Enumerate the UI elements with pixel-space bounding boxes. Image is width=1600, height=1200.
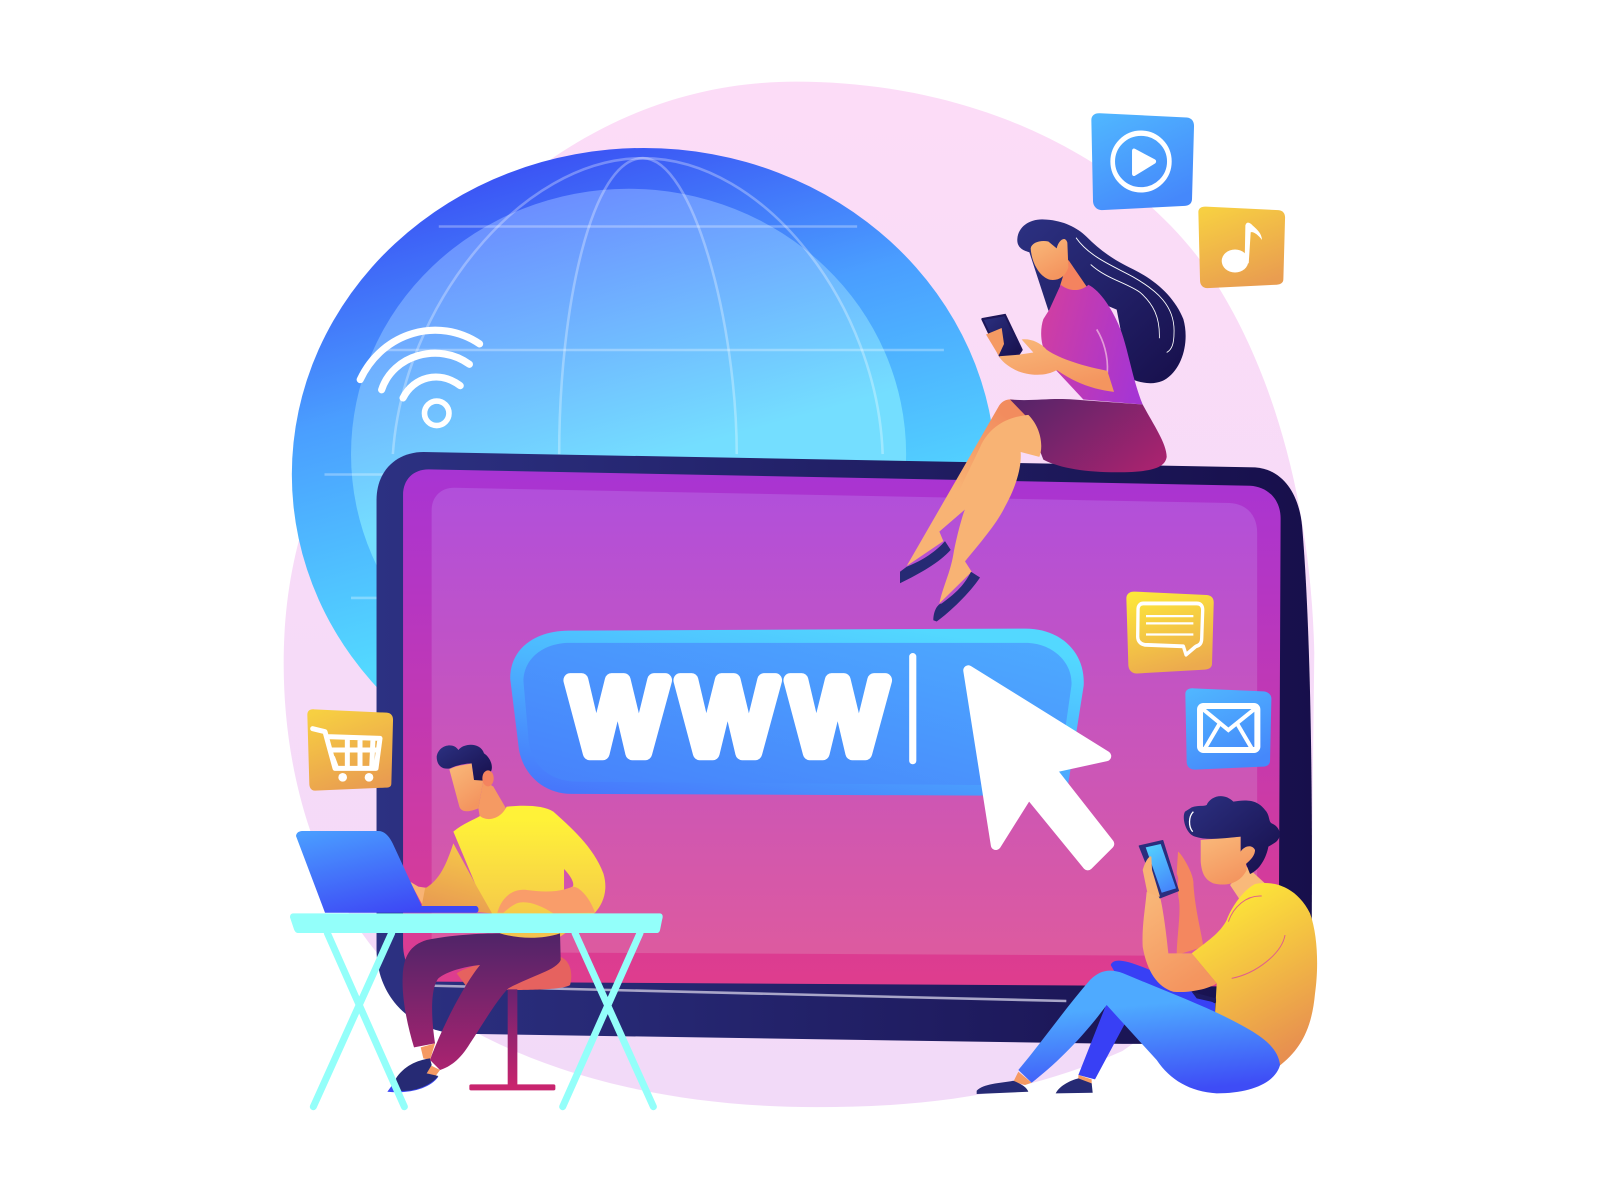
neck <box>478 780 506 820</box>
shoes <box>977 1078 1093 1094</box>
icon: music tile <box>1198 207 1285 288</box>
face <box>1201 837 1255 885</box>
face <box>449 763 483 811</box>
arm <box>999 339 1114 392</box>
text caret <box>909 653 916 764</box>
man at the laptop <box>296 745 605 1092</box>
icon: shopping cart tile <box>307 709 393 791</box>
shoes <box>387 1077 438 1092</box>
ear <box>482 770 494 786</box>
hair <box>1184 796 1280 874</box>
ankles <box>1013 1072 1092 1085</box>
monitor screen <box>403 469 1281 987</box>
icon: play tile <box>1091 113 1194 210</box>
ankles <box>421 1043 440 1077</box>
pants <box>403 933 561 1070</box>
neck <box>1060 260 1087 291</box>
hand holding phone <box>986 328 1004 356</box>
icon: mail tile <box>1185 688 1271 770</box>
stool stem and base <box>508 989 517 1087</box>
globe <box>292 148 996 801</box>
shirt <box>1192 883 1317 1067</box>
hand <box>1143 856 1160 897</box>
forearm <box>497 887 595 913</box>
desk <box>290 913 663 1107</box>
neck <box>1230 867 1265 900</box>
back leg <box>907 399 1037 566</box>
laptop <box>296 831 479 913</box>
phone <box>982 315 1022 356</box>
woman sitting on the monitor <box>900 219 1186 621</box>
back arm <box>422 843 497 914</box>
sweater <box>453 806 605 939</box>
back arm <box>1177 852 1203 955</box>
cursor arrow <box>968 670 1109 865</box>
purple top <box>1041 285 1143 404</box>
hair <box>1017 219 1186 383</box>
shoes <box>900 541 980 621</box>
near arm <box>1143 892 1217 992</box>
monitor inner screen <box>432 488 1257 956</box>
front leg <box>939 415 1041 603</box>
search bar <box>510 629 1084 796</box>
hand <box>410 882 430 907</box>
front leg jeans <box>1018 971 1280 1093</box>
stool seat <box>457 957 571 990</box>
skirt <box>1010 399 1167 472</box>
body blue back leg <box>1078 961 1215 1079</box>
icon: chat tile <box>1126 592 1214 674</box>
man sitting on the floor <box>977 796 1317 1094</box>
icon: wifi <box>360 330 480 426</box>
face <box>1031 239 1068 280</box>
hair <box>437 745 492 781</box>
www text: www <box>569 629 900 783</box>
background blob <box>284 82 1314 1107</box>
monitor <box>377 452 1312 1044</box>
phone <box>1139 841 1178 898</box>
monitor frame <box>377 452 1312 1044</box>
